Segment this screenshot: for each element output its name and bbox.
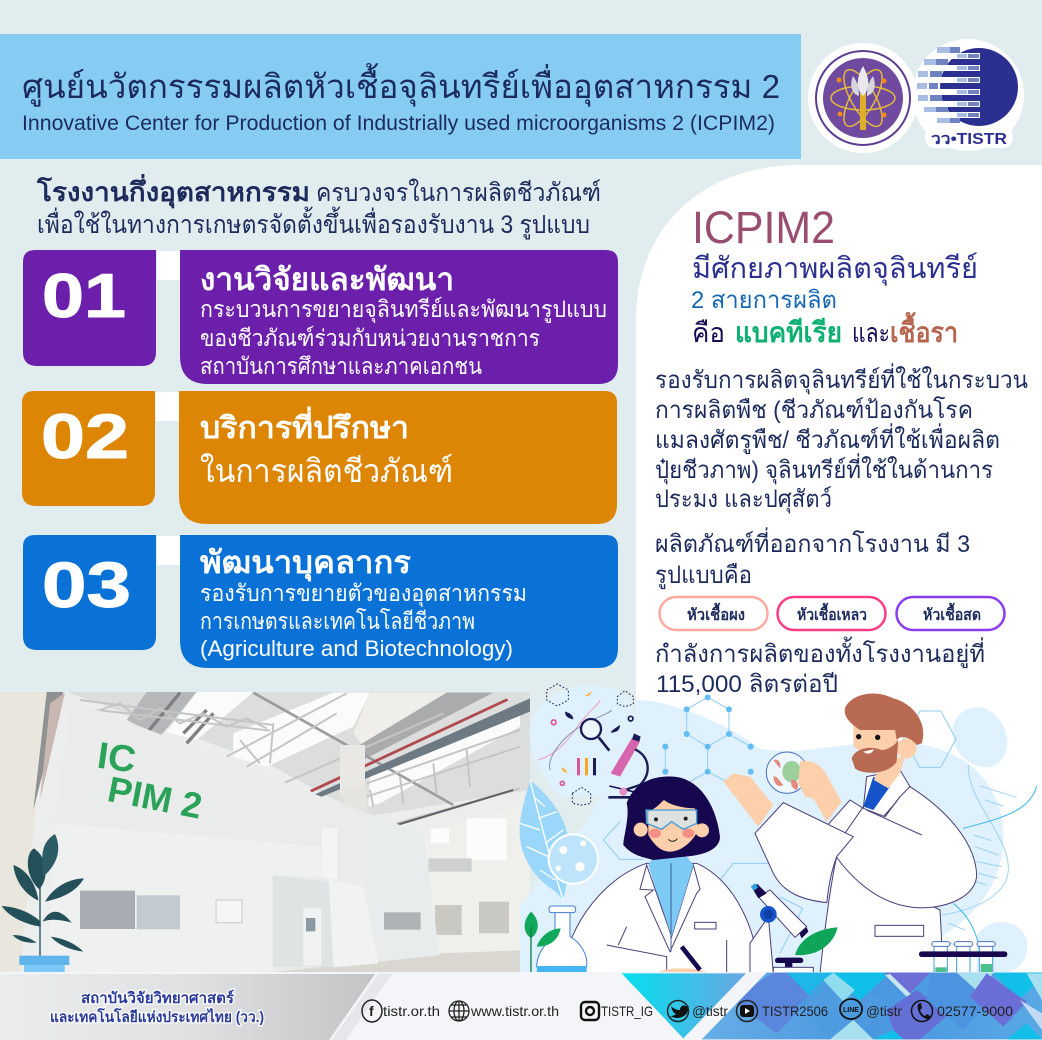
leaf: [520, 780, 570, 900]
wall: [47, 700, 439, 972]
pill: liquid starter: หัวเชื้อเหลว: [797, 602, 867, 624]
intro text: [36, 173, 601, 240]
social links: 02577-9000: [937, 1003, 1013, 1019]
card 01: research and development: [23, 250, 618, 384]
heading: ICPIM2 capacity: คือ: [692, 318, 725, 348]
description paragraph: แมลงศัตรูพืช/ ชีวภัณฑ์ที่ใช้เพื่อผลิต: [655, 423, 1000, 455]
heading: ICPIM2 capacity: แบคทีเรีย: [735, 317, 842, 348]
background blobs: [520, 700, 1003, 973]
card 02: consulting: [22, 391, 617, 524]
heading: ICPIM2 capacity: [691, 202, 978, 348]
icon: potted plant: [2, 834, 84, 972]
products intro text: รูปแบบคือ: [655, 562, 752, 590]
left arm hand: [723, 773, 773, 827]
molecule network: [603, 697, 956, 953]
social links: @tistr: [692, 1003, 728, 1019]
organisation name: [50, 989, 264, 1026]
card 01: research and development: งานวิจัยและพัฒนา: [200, 262, 454, 297]
lab icons: [547, 684, 633, 805]
card 02: consulting: บริการที่ปรึกษา: [200, 406, 409, 445]
heading: ICPIM2 capacity: ICPIM2: [692, 202, 835, 253]
logo: TISTR: [912, 39, 1024, 151]
heading: ICPIM2 capacity: เชื้อรา: [890, 311, 958, 348]
intro text: โรงงานกึ่งอุตสาหกรรม: [36, 173, 310, 209]
woman: [562, 776, 760, 973]
pill: liquid starter: [778, 597, 886, 630]
back wall: [423, 803, 530, 963]
description paragraph: [655, 363, 1028, 514]
heading: ICPIM2 capacity: มีศักยภาพผลิตจุลินทรีย์: [692, 252, 978, 286]
pill: fresh starter: หัวเชื้อสด: [923, 602, 981, 624]
logo: ministry seal: [808, 43, 918, 153]
right white panel: [636, 165, 1042, 975]
organisation name: สถาบันวิจัยวิทยาศาสตร์: [81, 989, 235, 1007]
social links: @tistr: [866, 1003, 902, 1019]
products intro text: ผลิตภัณฑ์ที่ออกจากโรงงาน มี 3: [655, 527, 970, 558]
card 03: personnel development: (Agriculture and Biotechnology): [200, 636, 513, 661]
card 01: research and development: สถาบันการศึกษาและภาคเอกชน: [200, 353, 482, 379]
microscope: [750, 883, 813, 973]
card 01: research and development: กระบวนการขยายจุลินทรีย์และพัฒนารูปแบบ: [200, 296, 607, 323]
floor: [270, 950, 530, 972]
description paragraph: ปุ๋ยชีวภาพ) จุลินทรีย์ที่ใช้ในด้านการ: [655, 453, 993, 485]
description paragraph: ประมง และปศุสัตว์: [655, 485, 832, 514]
left pillar: [0, 692, 47, 972]
card 03: personnel development: รองรับการขยายตัวของอุตสาหกรรม: [200, 580, 527, 607]
card 01: research and development: 01: [42, 262, 126, 331]
pill: powder starter: หัวเชื้อผง: [687, 602, 745, 624]
pill: fresh starter: [896, 597, 1004, 630]
social links: TISTR2506: [762, 1003, 828, 1019]
social links: www.tistr.or.th: [470, 1003, 559, 1019]
sign text: IC: [95, 734, 139, 781]
description paragraph: รองรับการผลิตจุลินทรีย์ที่ใช้ในกระบวน: [655, 363, 1028, 395]
dna strand right: [942, 765, 1017, 948]
illustration: scientists: [520, 684, 1037, 973]
doorway: [273, 875, 333, 967]
social links: tistr.or.th: [383, 1003, 440, 1019]
subtitle: Innovative Center for Production of Industrially used microorganisms 2 (ICPIM2): [22, 112, 775, 135]
card 03: personnel development: พัฒนาบุคลากร: [200, 545, 411, 582]
products intro text: [655, 527, 970, 590]
capacity text: กำลังการผลิตของทั้งโรงงานอยู่ที่: [655, 636, 985, 669]
social links: TISTR_IG: [601, 1003, 653, 1019]
microscope small: [611, 738, 640, 777]
roof tones: [67, 692, 530, 817]
green leaf: [795, 927, 838, 955]
flask and sprout: [525, 906, 587, 973]
intro text: ครบวงจรในการผลิตชีวภัณฑ์: [316, 178, 601, 207]
card 02: consulting: 02: [41, 402, 129, 472]
test tube rack: [919, 942, 1007, 973]
heading: ICPIM2 capacity: และ: [852, 318, 890, 348]
man: [723, 694, 977, 973]
footer: [0, 972, 1042, 1040]
capacity text: [655, 636, 985, 698]
pill: powder starter: [660, 597, 768, 630]
card 03: personnel development: การเกษตรและเทคโนโลยีชีวภาพ: [200, 608, 475, 634]
intro text: เพื่อใช้ในทางการเกษตรจัดตั้งขึ้นเพื่อรองรับงาน 3 รูปแบบ: [37, 206, 590, 240]
windows: [80, 891, 135, 929]
social links: [362, 999, 1013, 1022]
footer triangles: [622, 973, 1042, 1039]
heading: ICPIM2 capacity: 2 สายการผลิต: [691, 287, 837, 314]
logo: TISTR: วว•TISTR: [931, 131, 1007, 148]
sign text: PIM 2: [104, 768, 206, 827]
photo: ICPIM2 cleanroom building: [0, 692, 530, 972]
social links: LINE: [843, 1007, 859, 1014]
sign text: [95, 734, 206, 827]
description paragraph: การผลิตพืช (ชีวภัณฑ์ป้องกันโรค: [655, 396, 973, 424]
header banner: [0, 34, 801, 159]
card 01: research and development: ของชีวภัณฑ์ร่วมกับหน่วยงานราชการ: [200, 325, 540, 351]
social links: f: [369, 1003, 374, 1019]
card 03: personnel development: 03: [42, 549, 131, 621]
card 02: consulting: ในการผลิตชีวภัณฑ์: [200, 453, 453, 489]
card 03: personnel development: [23, 535, 618, 668]
organisation name: และเทคโนโลยีแห่งประเทศไทย (วว.): [50, 1007, 264, 1026]
hand with dish: [766, 752, 808, 793]
capacity text: 115,000 ลิตรต่อปี: [656, 671, 838, 698]
title: ศูนย์นวัตกรรรมผลิตหัวเชื้อจุลินทรีย์เพื่ออุตสาหกรรม 2: [22, 63, 780, 107]
